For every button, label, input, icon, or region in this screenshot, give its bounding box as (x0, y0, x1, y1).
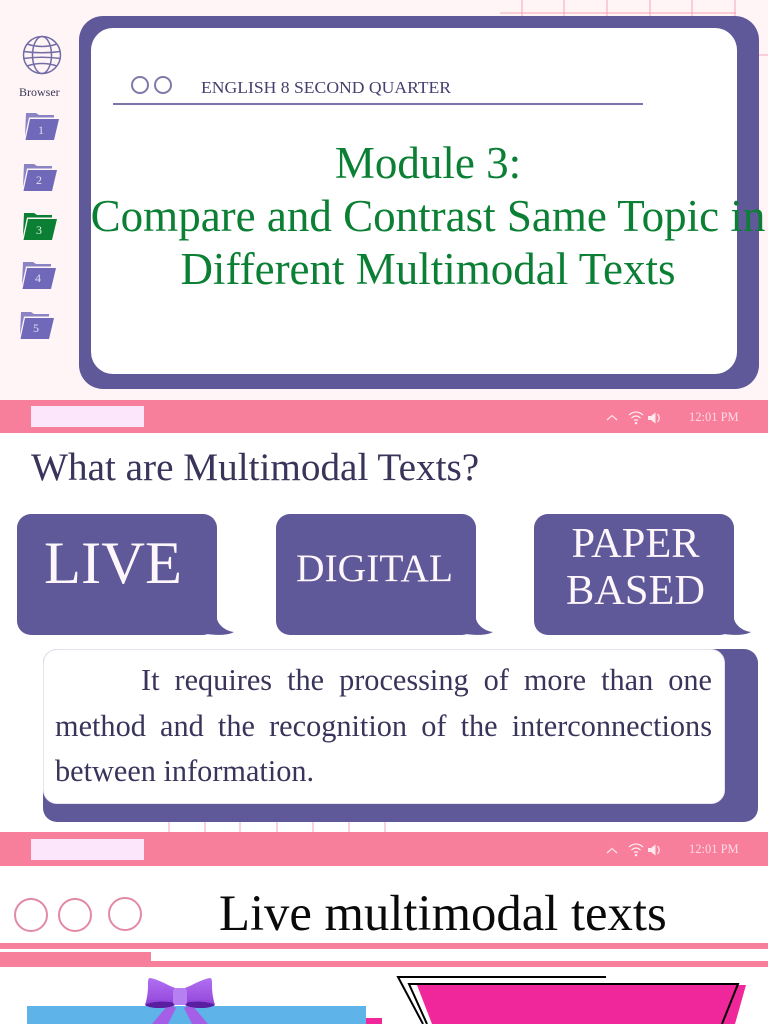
text: definition: method and the recognition of the interconnections (55, 708, 712, 742)
icon: circle 1 (14, 898, 48, 932)
divider tab left (0, 952, 151, 967)
taskbar search box (31, 839, 144, 860)
text: definition: It requires the processing of more than one (141, 663, 712, 697)
heading: module title: Module 3: (335, 138, 521, 188)
icon: tray chevron (606, 848, 618, 854)
icon: wifi and speaker (628, 843, 660, 856)
callout: LIVE (17, 514, 234, 635)
icon: folder 3 active (23, 213, 57, 240)
divider band upper (0, 943, 768, 949)
icon: circle 3 (108, 897, 142, 931)
icon: folder 4 (22, 262, 56, 289)
icon: wifi and speaker (628, 411, 660, 424)
text: definition: between information. (55, 754, 314, 788)
panel: pink trapezoid (396, 976, 746, 1024)
icon: folder 2: 2 (36, 173, 42, 187)
heading: What are Multimodal Texts: What are Multimodal Texts? (31, 446, 479, 489)
icon: folder 5: 5 (33, 321, 39, 335)
icon: window circle 2 (154, 76, 172, 94)
callout: DIGITAL: DIGITAL (296, 546, 453, 590)
icon: window circle 1 (131, 76, 149, 94)
taskbar search box (31, 406, 144, 427)
icon: folder 4: 4 (35, 271, 41, 285)
panel: title card (79, 16, 759, 389)
icon: folder 2 (23, 164, 57, 191)
callout: DIGITAL (276, 514, 493, 635)
icon: folder 3 active: 3 (36, 223, 42, 237)
heading: module title: Different Multimodal Texts (180, 244, 676, 294)
icon: circle 2 (58, 898, 92, 932)
icon: folder 1 (25, 113, 59, 140)
panel: desktop window background (0, 0, 768, 400)
pink tab (366, 1018, 382, 1024)
icon: purple bow (145, 978, 215, 1024)
title card inner (91, 28, 737, 374)
icon: tray chevron (606, 414, 618, 420)
taskbar 2 (0, 832, 768, 866)
icon: globe browser (22, 36, 62, 74)
icon: folder 5 (20, 312, 54, 339)
panel: blue box (27, 1006, 366, 1024)
taskbar 1 (0, 400, 768, 433)
icon: folder 1: 1 (38, 123, 44, 137)
callout: LIVE: LIVE (44, 530, 182, 597)
heading: Live multimodal texts: Live multimodal texts (219, 885, 667, 941)
text: clock: 12:01 PM (689, 842, 739, 856)
text: definition (55, 663, 712, 788)
callout: PAPER BASED: PAPER (571, 520, 700, 566)
divider band lower (0, 961, 768, 967)
text: clock: 12:01 PM (689, 410, 739, 424)
heading: module title (91, 138, 765, 294)
divider line under window header (113, 103, 643, 105)
heading: module title: Compare and Contrast Same Topic in (91, 191, 765, 241)
callout: PAPER BASED (534, 514, 751, 635)
label: Browser: Browser (19, 85, 60, 99)
panel: definition card (43, 649, 758, 822)
text: course label: ENGLISH 8 SECOND QUARTER (201, 78, 451, 97)
callout: PAPER BASED: BASED (566, 567, 705, 614)
definition inner card (43, 649, 725, 804)
